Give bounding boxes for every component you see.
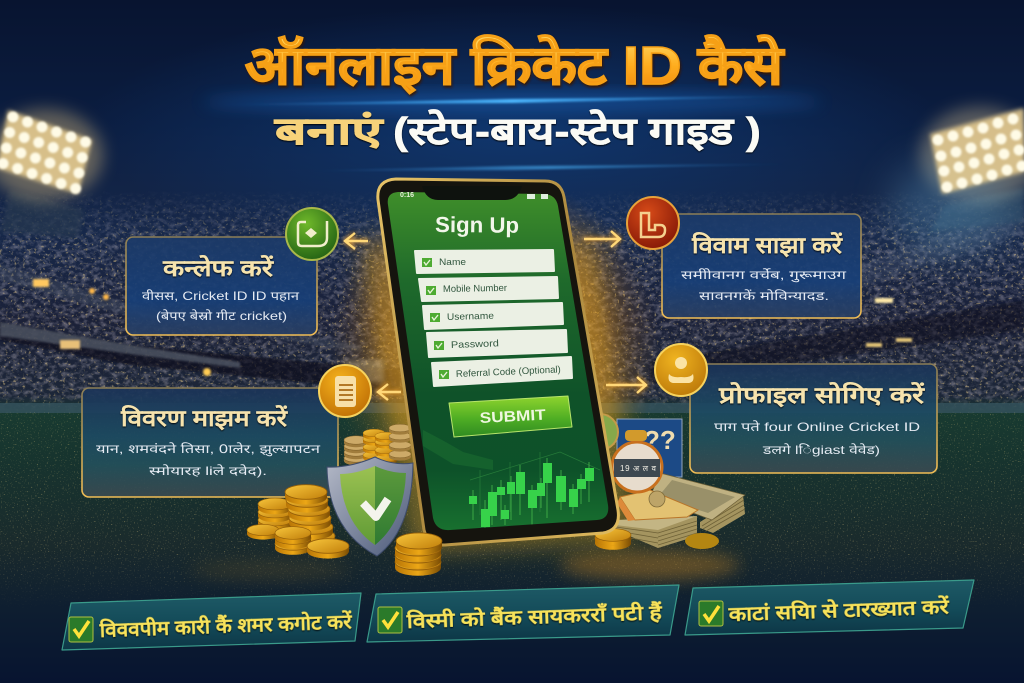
title: line 2: (स्टेप-बाय-स्टेप गाइड ) <box>393 109 761 153</box>
cash stacks <box>615 473 745 548</box>
title: line 2 <box>274 109 800 171</box>
icon: share step <box>627 197 679 249</box>
panel: profile step <box>690 364 937 473</box>
front coins right <box>395 533 442 576</box>
stopwatch <box>612 430 662 492</box>
form field: name <box>415 250 554 273</box>
phone screen <box>388 192 608 530</box>
floodlights: right <box>890 107 1024 250</box>
notch <box>422 186 522 200</box>
banner: second tip <box>367 585 679 642</box>
check mark <box>363 499 388 517</box>
body: share <box>681 268 846 303</box>
body: details: यान, शमवंदने तिसा, 0ालेर, झुल्यापटन <box>96 442 320 457</box>
title: line 1: ऑनलाइन क्रिकेट ID कैसे <box>245 34 786 96</box>
heading: details: विवरण माझम करें <box>120 404 289 431</box>
arrow: to share <box>584 231 620 247</box>
heading: connect: कन्लेफ करें <box>162 254 275 281</box>
back coin stacks <box>344 424 411 465</box>
heading: share: विवाम साझा करें <box>691 231 844 258</box>
title: line 2: बनाएं <box>274 111 385 153</box>
sign up heading: Sign Up <box>435 212 519 238</box>
body: connect: वीसस, Cricket ID ID पहान <box>142 289 299 303</box>
check icon <box>378 607 402 633</box>
panel: connect step <box>126 237 317 335</box>
question box <box>617 419 682 477</box>
phone <box>378 179 618 545</box>
stopwatch: 19 अ ल व <box>620 464 657 473</box>
body: profile <box>714 420 920 457</box>
panel: details step <box>82 388 338 497</box>
form field: username <box>423 303 563 329</box>
text: विस्मी को बैंक सायकरराँ पटी हैं <box>405 600 664 633</box>
form field: referral code <box>432 357 572 386</box>
form field: name: Name <box>439 257 466 268</box>
shield with check <box>327 457 413 556</box>
icon: profile step <box>655 344 707 396</box>
candlestick chart <box>423 430 600 528</box>
form field: password: Password <box>451 338 499 351</box>
form field: mobile number: Mobile Number <box>443 283 507 295</box>
arrow: to connect <box>345 233 368 249</box>
status bar: 0:16 <box>400 192 414 199</box>
title: line 1 <box>202 34 822 111</box>
banner: third tip <box>685 580 974 635</box>
panel: share step <box>662 214 861 318</box>
text: काटां सयिा से टारख्यात करें <box>727 594 950 626</box>
icon: connect step <box>286 208 338 260</box>
banner: first tip <box>62 593 361 650</box>
coin right <box>595 529 719 550</box>
body: details <box>96 442 320 478</box>
form field: password <box>427 330 567 357</box>
money and stopwatch <box>582 414 745 550</box>
body: details: स्मोयारह liले दवेद). <box>149 464 267 478</box>
body: share: समीोवानग वर्चेब, गुरूमाउग <box>681 268 846 283</box>
heading: profile: प्रोफाइल सोगिए करें <box>718 381 926 408</box>
body: connect <box>142 289 299 323</box>
phone glow <box>330 175 660 535</box>
submit button: SUBMIT <box>479 407 546 427</box>
form field: mobile number <box>419 277 558 301</box>
icon: details step <box>319 365 371 417</box>
floodlights: left <box>0 109 103 238</box>
question box: ?? <box>644 425 676 455</box>
front coins left <box>247 485 349 559</box>
form field: referral code: Referral Code (Optional) <box>456 364 561 380</box>
status bar <box>400 192 548 199</box>
arrow: to details <box>378 384 401 400</box>
arrow: to profile <box>606 377 646 393</box>
check icon <box>69 617 93 642</box>
body: profile: पाग पते four Online Cricket ID <box>714 420 920 434</box>
body: share: सावनगकें मोविन्यादड. <box>699 289 829 303</box>
form field: username: Username <box>447 311 494 323</box>
submit button <box>449 396 572 437</box>
body: profile: डलगे lिंgiast वेवेड) <box>762 443 880 457</box>
text: विववपीम कारी कैं शमर कगोट करें <box>98 609 353 642</box>
check icon <box>699 601 723 626</box>
body: connect: (बेपए बेस्रो गीट cricket) <box>156 309 287 323</box>
